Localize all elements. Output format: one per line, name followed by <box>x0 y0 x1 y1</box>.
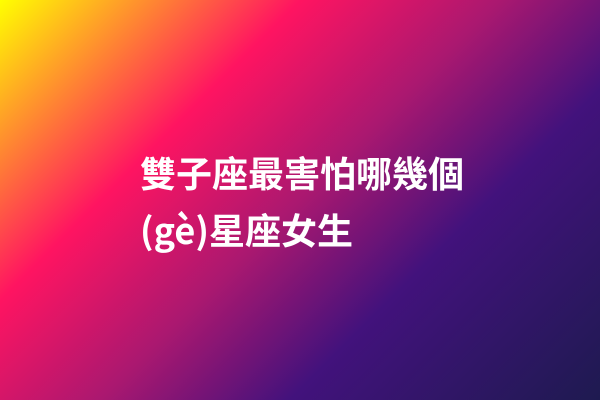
title: 雙子座最害怕哪幾個 <box>140 146 464 198</box>
title <box>140 146 464 255</box>
title: (gè)星座女生 <box>140 203 353 255</box>
